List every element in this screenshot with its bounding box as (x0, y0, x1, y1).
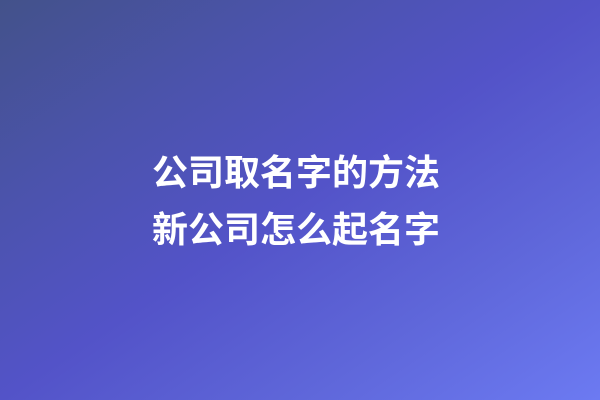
title line 1: 公司取名字的方法 (152, 152, 440, 193)
title line 2: 新公司怎么起名字 (152, 209, 440, 250)
title (152, 152, 440, 250)
